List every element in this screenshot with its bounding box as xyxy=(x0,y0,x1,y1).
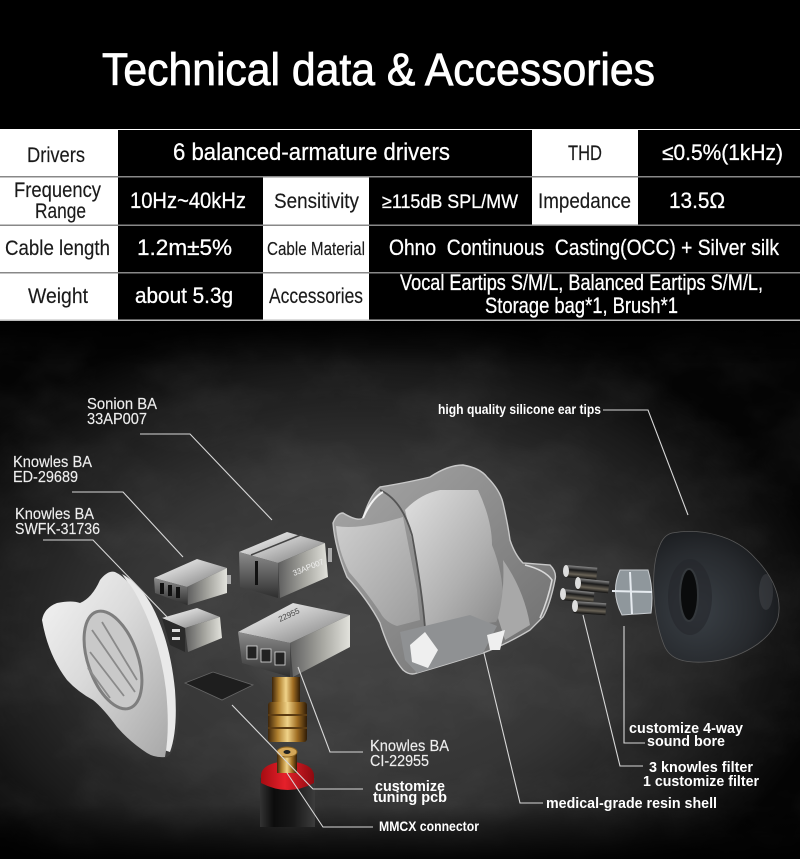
label: customize tuning pcb xyxy=(373,778,447,806)
gold connector xyxy=(268,677,307,742)
row: weight and accessories: Storage bag*1, Brush*1 xyxy=(485,293,678,318)
row: weight and accessories: about 5.3g xyxy=(135,283,233,308)
driver: Knowles CI-22955: 22955 xyxy=(277,606,302,624)
faceplate xyxy=(42,572,179,758)
label: filters: 1 customize filter xyxy=(643,773,759,790)
mmcx cable plug xyxy=(260,747,315,827)
label: Sonion BA 33AP007 xyxy=(87,396,157,428)
four filters xyxy=(560,565,609,615)
row: drivers and THD: ≤0.5%(1kHz) xyxy=(662,140,783,165)
title: Technical data & Accessories xyxy=(102,44,655,95)
row: frequency, sensitivity, impedance: 13.5Ω xyxy=(669,188,725,213)
row: frequency, sensitivity, impedance: Frequency xyxy=(14,179,101,202)
row: drivers and THD: THD xyxy=(568,142,602,165)
leader lines xyxy=(43,410,688,827)
driver: Knowles CI-22955 xyxy=(238,603,350,677)
label: Knowles BA ED-29689: ED-29689 xyxy=(13,469,78,486)
silicone ear tip xyxy=(654,531,779,662)
label: Knowles BA SWFK-31736: Knowles BA xyxy=(15,506,94,523)
exploded view of the earphone parts xyxy=(42,465,779,827)
tuning pcb xyxy=(185,672,253,700)
4-way sound bore xyxy=(612,570,652,615)
label: Knowles BA CI-22955: Knowles BA xyxy=(370,738,449,755)
label: Knowles BA SWFK-31736: SWFK-31736 xyxy=(15,521,100,538)
label: Knowles BA SWFK-31736 xyxy=(15,506,100,538)
label: Knowles BA CI-22955 xyxy=(370,738,449,770)
row: cable length and material: Cable Material xyxy=(267,239,365,259)
row: frequency, sensitivity, impedance: 10Hz~40kHz xyxy=(130,188,246,213)
label: filters: 3 knowles filter xyxy=(649,759,753,776)
label: Sonion BA 33AP007: 33AP007 xyxy=(87,411,147,428)
row: drivers and THD xyxy=(27,139,783,167)
row: cable length and material: Cable length xyxy=(5,237,110,260)
driver: Sonion 33AP007 xyxy=(239,532,332,598)
row: drivers and THD: 6 balanced-armature drivers xyxy=(173,139,450,166)
label: customize tuning pcb: tuning pcb xyxy=(373,789,447,806)
label: customize 4-way sound bore: sound bore xyxy=(647,733,725,750)
label: medical-grade resin shell: medical-grade resin shell xyxy=(546,795,717,812)
row: frequency, sensitivity, impedance: Sensitivity xyxy=(274,190,359,213)
row: cable length and material: 1.2m±5% xyxy=(137,235,232,260)
row: cable length and material xyxy=(5,235,780,260)
label: filters xyxy=(643,759,759,790)
label: Knowles BA ED-29689 xyxy=(13,454,92,486)
driver: Knowles SWFK-31736 xyxy=(162,608,222,652)
row: frequency, sensitivity, impedance: Range xyxy=(35,200,86,223)
row: weight and accessories xyxy=(28,270,763,318)
row: frequency, sensitivity, impedance xyxy=(14,179,725,223)
label: Knowles BA CI-22955: CI-22955 xyxy=(370,753,429,770)
label: MMCX connector: MMCX connector xyxy=(379,818,479,834)
row: frequency, sensitivity, impedance: ≥115dB SPL/MW xyxy=(382,192,518,213)
row: weight and accessories: Accessories xyxy=(269,285,363,308)
smoky dark background of the exploded view xyxy=(0,321,800,859)
label: customize 4-way sound bore: customize 4-way xyxy=(629,720,744,737)
row: weight and accessories: Weight xyxy=(28,285,88,308)
row: drivers and THD: Drivers xyxy=(27,144,85,167)
label: Sonion BA 33AP007: Sonion BA xyxy=(87,396,157,413)
driver: Sonion 33AP007: 33AP007 xyxy=(291,557,326,578)
specification table xyxy=(0,129,800,321)
driver: Knowles ED-29689 xyxy=(154,559,231,605)
label: customize 4-way sound bore xyxy=(629,720,744,750)
label: Knowles BA ED-29689: Knowles BA xyxy=(13,454,92,471)
label: high quality silicone ear tips: high quality silicone ear tips xyxy=(438,401,601,417)
label: customize tuning pcb: customize xyxy=(375,778,445,795)
row: frequency, sensitivity, impedance: Impedance xyxy=(538,190,631,213)
transparent resin shell xyxy=(333,465,555,674)
